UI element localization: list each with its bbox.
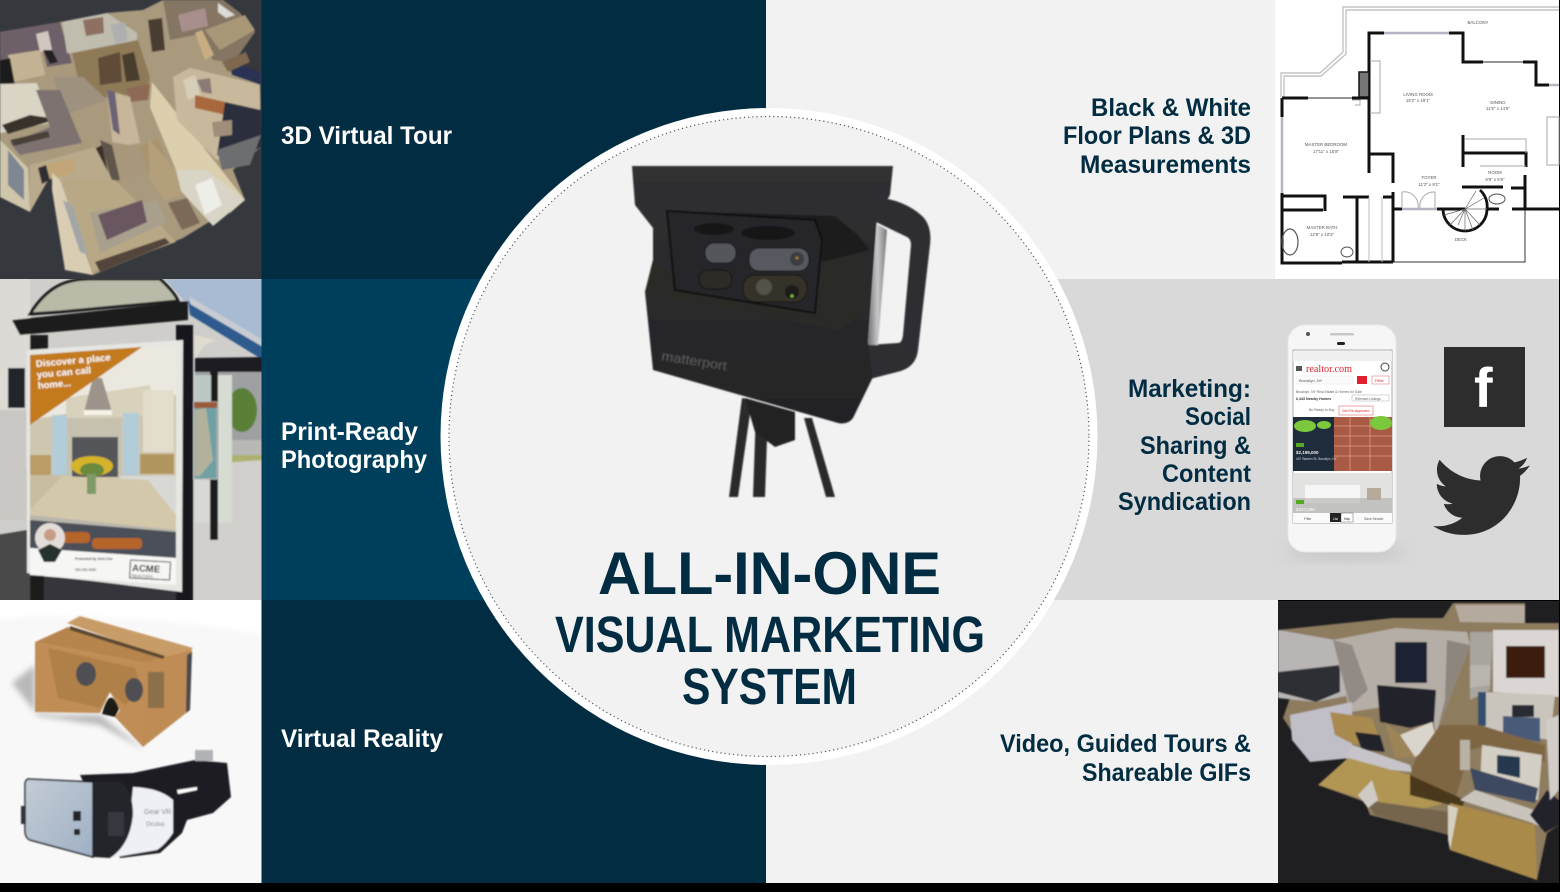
shelter roof (30, 279, 178, 314)
icon: twitter bird (1433, 456, 1530, 535)
room labels: 11'5" x 14'6" (1486, 106, 1510, 111)
lenses (694, 223, 809, 302)
kitchen photo (30, 394, 176, 480)
room labels: LIVING ROOM (1403, 92, 1433, 97)
room labels: FOYER (1421, 175, 1437, 180)
poster headline: home... (37, 378, 71, 392)
label: Black & White Floor Plans & 3D Measurements (1063, 94, 1251, 179)
phone screen (1293, 350, 1392, 523)
label: Black & White Floor Plans & 3D Measurements: Measurements (1080, 151, 1251, 179)
panel: marketing band (766, 279, 1559, 600)
image: VR headsets: Gear VR (144, 809, 171, 816)
label: 3D Virtual Tour: 3D Virtual Tour (281, 122, 452, 150)
house silhouette (1278, 603, 1559, 880)
balcony outline (1281, 7, 1559, 97)
image: smartphone with realtor listing: Filter (1304, 517, 1312, 521)
label: Marketing, Social Sharing & Content Syndication: Syndication (1118, 488, 1251, 516)
image: smartphone with realtor listing: Filter (1375, 378, 1385, 383)
panel: virtual reality band (261, 600, 766, 883)
image: smartphone with realtor listing: 437 Warren St, Brooklyn, NY (1296, 457, 1338, 461)
label: Marketing, Social Sharing & Content Syndication: Sharing & (1140, 432, 1251, 460)
label: Marketing, Social Sharing & Content Syndication: Content (1162, 460, 1252, 488)
poster headline: you can call (36, 365, 92, 381)
ACME logo: ACME (132, 563, 160, 576)
icon: facebook (1444, 347, 1525, 427)
room labels: 12'8" x 10'3" (1310, 232, 1334, 237)
panel: video band (766, 600, 1278, 883)
ACME logo (130, 560, 170, 580)
poster frame (27, 340, 183, 592)
image: smartphone with realtor listing: Brooklyn, NY (1299, 378, 1323, 383)
top right rooms (163, 0, 255, 63)
yellow floors (1318, 758, 1443, 809)
long wall (150, 82, 245, 213)
agent footer (30, 548, 176, 585)
lens plate (667, 211, 822, 313)
room labels: MASTER BATH (1307, 225, 1337, 230)
room labels: 11'2" x 9'1" (1418, 182, 1440, 187)
image: smartphone with realtor listing (1285, 325, 1405, 561)
cardboard viewer (67, 616, 193, 660)
image: floor plan (1275, 0, 1559, 279)
label: Video, Guided Tours & Shareable GIFs: Video, Guided Tours & (1000, 730, 1251, 758)
image: smartphone with realtor listing: Get Pre-Approved (1342, 409, 1369, 413)
label: Video, Guided Tours & Shareable GIFs: Shareable GIFs (1082, 759, 1251, 787)
panel: print-ready photography band (261, 279, 766, 600)
label: Virtual Reality: Virtual Reality (281, 725, 443, 753)
panel: 3D virtual tour band (261, 0, 766, 279)
label: Print-Ready Photography (281, 418, 427, 474)
camera: Matterport Pro2 (632, 166, 930, 497)
realtor logo: realtor.com (1306, 364, 1352, 375)
panel: floor plans band (766, 0, 1276, 279)
image: VR headsets (0, 600, 280, 892)
room labels: BALCONY (1468, 20, 1489, 25)
spiral stair (1443, 190, 1487, 231)
poster headline (35, 352, 113, 392)
main title: VISUAL MARKETING (555, 606, 985, 663)
phone back (25, 779, 93, 857)
room labels: 9'8" x 5'5" (1485, 177, 1505, 182)
image: smartphone with realtor listing: Relevant Listings (1355, 397, 1381, 401)
label: Black & White Floor Plans & 3D Measurements: Black & White (1091, 94, 1251, 122)
mid band (645, 250, 867, 330)
image: smartphone with realtor listing: Map (1344, 517, 1350, 521)
walls (1282, 33, 1559, 263)
map sign (194, 402, 217, 479)
label: Marketing, Social Sharing & Content Syndication (1118, 375, 1252, 516)
label: Marketing, Social Sharing & Content Syndication: Marketing: (1128, 375, 1251, 403)
label: Marketing, Social Sharing & Content Syndication: Social (1185, 403, 1251, 431)
sky (164, 279, 262, 340)
flowers (71, 456, 113, 476)
left lower room (30, 147, 112, 211)
main title: ALL-IN-ONE (598, 540, 941, 607)
icon: facebook: f (1474, 356, 1493, 419)
image: video dollhouse (1278, 601, 1559, 883)
listing photo (1293, 417, 1392, 471)
wood floor (1410, 725, 1545, 800)
room labels: 15'2" x 19'1" (1406, 98, 1430, 103)
poster headline: Discover a place (35, 352, 111, 370)
phone tab bar (1293, 513, 1392, 523)
matterport logo: matterport (661, 348, 728, 373)
image: smartphone with realtor listing: $2,199,000 (1296, 450, 1319, 455)
room labels: ROOM (1488, 170, 1502, 175)
fixtures (1352, 61, 1559, 208)
image: smartphone with realtor listing: Save Search (1364, 517, 1384, 521)
image: smartphone with realtor listing: 6,443 Nearby Homes (1296, 397, 1331, 401)
main title: SYSTEM (682, 658, 857, 715)
label: Black & White Floor Plans & 3D Measurements: Floor Plans & 3D (1063, 122, 1251, 150)
cardboard shadow (12, 665, 145, 750)
room labels: 17'11" x 15'8" (1313, 149, 1340, 154)
room labels: DINING (1490, 100, 1506, 105)
image: smartphone with realtor listing: Be Ready to Buy (1309, 408, 1335, 412)
side strip (868, 224, 887, 345)
image: VR headsets: Oculus (146, 822, 165, 828)
shelter posts (176, 325, 193, 603)
glass stripes (218, 375, 232, 523)
room labels (1305, 20, 1510, 242)
image: smartphone with realtor listing: List (1333, 517, 1338, 521)
room labels: MASTER BEDROOM (1305, 142, 1347, 147)
gear vr body (110, 787, 173, 858)
ACME logo: REALTORS (132, 573, 153, 579)
tripod (729, 398, 835, 497)
label: Print-Ready Photography: Photography (281, 446, 427, 474)
main title (555, 540, 985, 715)
recess (667, 211, 870, 262)
gear vr strap (80, 760, 231, 858)
image: bus shelter poster (0, 276, 263, 603)
second listing (1293, 473, 1392, 513)
pendant lamp (96, 350, 98, 352)
image: smartphone with realtor listing: $437,000 (1296, 507, 1315, 512)
building (0, 279, 32, 410)
room labels: DECK (1455, 237, 1467, 242)
label: Print-Ready Photography: Print-Ready (281, 418, 418, 446)
image: bus shelter poster: 555-555-5555 (75, 568, 96, 572)
image: 3D dollhouse tour (0, 0, 262, 279)
center circle (440, 108, 1098, 765)
window strips (1282, 33, 1559, 209)
camera handle (866, 198, 930, 379)
label: Video, Guided Tours & Shareable GIFs (1000, 730, 1251, 787)
camera body (632, 166, 893, 423)
main floor (74, 179, 176, 272)
right room (173, 68, 261, 160)
image: smartphone with realtor listing: Brooklyn, NY Real Estate & Homes for Sale (1296, 390, 1362, 394)
image: bus shelter poster: Presented by John Doe (75, 557, 113, 561)
